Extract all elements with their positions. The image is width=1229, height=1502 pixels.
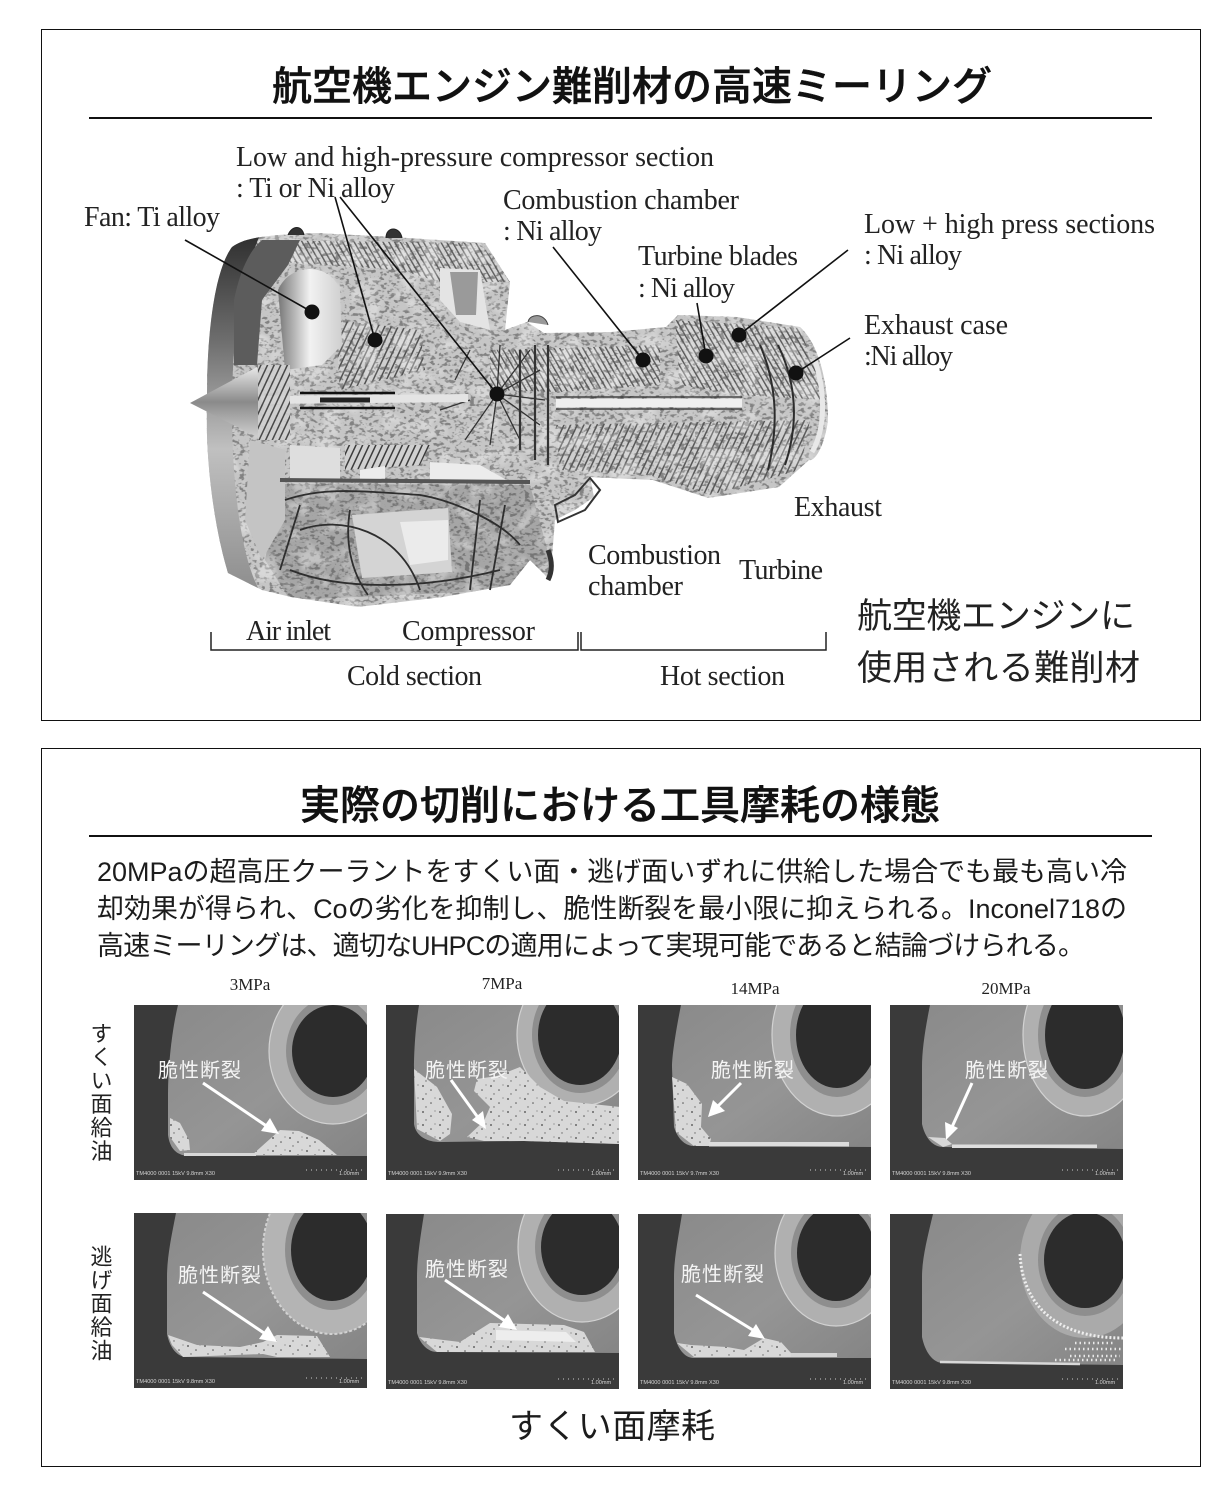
micrograph: rake 7MPa xyxy=(386,1005,619,1180)
micrograph: rake 7MPa: TM4000 0001 15kV 9.9mm X30 xyxy=(388,1171,467,1177)
engine part labels: Exhaust xyxy=(794,492,882,523)
panel: aircraft engine materials xyxy=(42,30,1200,720)
description text: 却効果が得られ、Coの劣化を抑制し、脆性断裂を最小限に抑えられる。Inconel718の xyxy=(97,894,1127,924)
engine part labels: Cold section xyxy=(347,661,482,692)
micrograph: rake 3MPa: 1.00mm xyxy=(339,1171,360,1177)
panel: tool wear in actual cutting xyxy=(42,748,1200,1466)
section brackets xyxy=(211,632,826,650)
micrograph: rake 14MPa: 脆性断裂 xyxy=(711,1059,795,1082)
micrograph: rake 14MPa xyxy=(638,1005,871,1180)
engine part labels: : Ni alloy xyxy=(864,240,962,271)
engine part labels xyxy=(84,142,1155,692)
micrograph: flank 14MPa: TM4000 0001 15kV 9.8mm X30 xyxy=(640,1380,719,1386)
micrograph: flank 7MPa: TM4000 0001 15kV 9.8mm X30 xyxy=(388,1380,467,1386)
column headers: coolant pressure: 14MPa xyxy=(730,979,780,998)
engine part labels: Air inlet xyxy=(246,616,331,647)
micrograph: flank 7MPa xyxy=(386,1214,619,1389)
engine part labels: :Ni alloy xyxy=(864,341,953,372)
caption second line: 使用される難削材 xyxy=(857,649,1140,688)
micrograph: flank 20MPa: 1.00mm xyxy=(1095,1380,1116,1386)
engine part labels: Low and high-pressure compressor section xyxy=(236,142,714,173)
micrograph: flank 3MPa: TM4000 0001 15kV 9.8mm X30 xyxy=(136,1379,215,1385)
micrograph: flank 3MPa: 1.00mm xyxy=(339,1379,360,1385)
micrograph: flank 7MPa: 脆性断裂 xyxy=(425,1258,509,1281)
description text xyxy=(97,857,1127,961)
micrograph: rake 3MPa: 脆性断裂 xyxy=(158,1059,242,1082)
micrograph: rake 3MPa xyxy=(134,1005,367,1180)
micrograph: rake 3MPa: TM4000 0001 15kV 9.8mm X30 xyxy=(136,1171,215,1177)
engine part labels: Combustion chamber xyxy=(503,185,740,216)
row label: flank face supply: 逃げ面給油 xyxy=(88,1245,112,1362)
micrograph: flank 14MPa: 脆性断裂 xyxy=(681,1263,765,1286)
engine part labels: Turbine xyxy=(739,555,823,586)
row label: rake face supply: すくい面給油 xyxy=(88,1022,112,1163)
engine part labels: Turbine blades xyxy=(638,241,798,272)
micrograph: flank 14MPa xyxy=(638,1214,871,1389)
engine part labels: Combustion xyxy=(588,540,721,571)
column headers: coolant pressure: 3MPa xyxy=(230,975,271,994)
engine part labels: Low + high press sections xyxy=(864,209,1155,240)
engine part labels: : Ti or Ni alloy xyxy=(236,173,395,204)
title: tool wear panel: 実際の切削における工具摩耗の様態 xyxy=(300,784,940,828)
description text: 高速ミーリングは、適切なUHPCの適用によって実現可能であると結論づけられる。 xyxy=(97,931,1085,961)
micrograph: rake 7MPa: 1.00mm xyxy=(591,1171,612,1177)
engine cutaway illustration xyxy=(190,228,840,615)
engine part labels: chamber xyxy=(588,571,684,602)
caption: materials used in aircraft engines: 航空機エンジンに xyxy=(857,597,1135,636)
micrograph: flank 20MPa: TM4000 0001 15kV 9.8mm X30 xyxy=(892,1380,971,1386)
leader lines and target dots xyxy=(185,197,850,402)
column headers: coolant pressure: 7MPa xyxy=(482,974,523,993)
description text: 20MPaの超高圧クーラントをすくい面・逃げ面いずれに供給した場合でも最も高い冷 xyxy=(97,857,1127,887)
engine part labels: Exhaust case xyxy=(864,310,1008,341)
micrograph: flank 14MPa: 1.00mm xyxy=(843,1380,864,1386)
column headers: coolant pressure xyxy=(230,974,1031,998)
micrograph: rake 14MPa: 1.00mm xyxy=(843,1171,864,1177)
title: engine panel: 航空機エンジン難削材の高速ミーリング xyxy=(272,65,992,109)
micrograph: rake 20MPa: 脆性断裂 xyxy=(965,1059,1049,1082)
micrograph: rake 14MPa: TM4000 0001 15kV 9.7mm X30 xyxy=(640,1171,719,1177)
column headers: coolant pressure: 20MPa xyxy=(981,979,1031,998)
engine part labels: Hot section xyxy=(660,661,785,692)
micrograph: rake 20MPa: 1.00mm xyxy=(1095,1171,1116,1177)
micrograph: flank 3MPa xyxy=(134,1213,367,1388)
micrograph: flank 20MPa xyxy=(890,1214,1123,1389)
micrograph: rake 20MPa xyxy=(890,1005,1123,1180)
engine part labels: Compressor xyxy=(402,616,536,647)
micrograph: rake 20MPa: TM4000 0001 15kV 9.8mm X30 xyxy=(892,1171,971,1177)
engine part labels: : Ni alloy xyxy=(503,216,602,247)
micrograph: flank 7MPa: 1.00mm xyxy=(591,1380,612,1386)
caption: rake face wear: すくい面摩耗 xyxy=(509,1408,715,1446)
micrograph: flank 3MPa: 脆性断裂 xyxy=(178,1264,262,1287)
engine part labels: Fan: Ti alloy xyxy=(84,202,220,233)
micrograph: rake 7MPa: 脆性断裂 xyxy=(425,1059,509,1082)
engine part labels: : Ni alloy xyxy=(638,273,735,304)
